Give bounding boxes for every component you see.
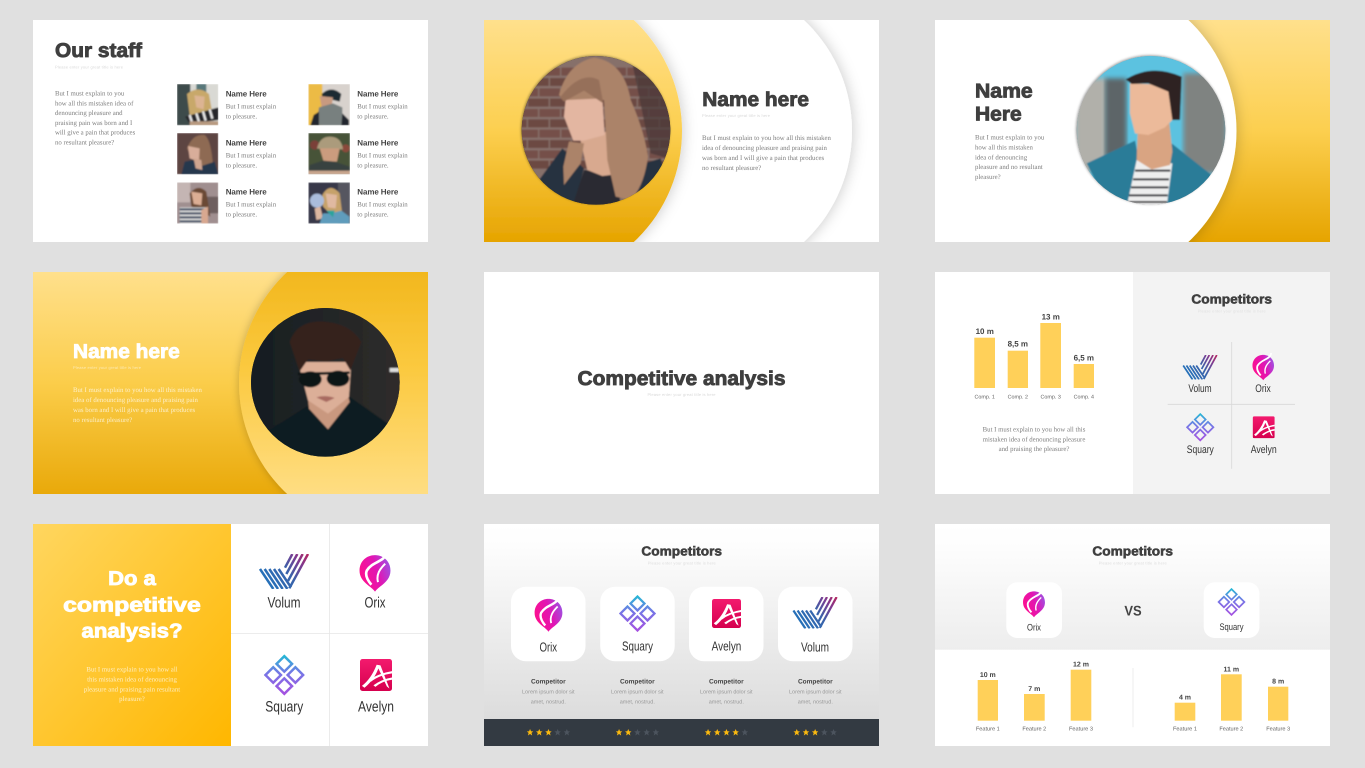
bar chart: comp 1 to 4: Comp. 1 [975, 395, 995, 401]
panel: competitors bar chart and logo grid [935, 272, 1330, 494]
text block: staff intro: how all this mistaken idea of [55, 100, 134, 107]
logo: Orix: Orix [1255, 383, 1271, 395]
logo: Orix [360, 552, 390, 611]
logo: Volum: Volum [1188, 383, 1212, 395]
logo: Avelyn [1251, 416, 1277, 456]
competitor descriptions: amet, nostrud. [798, 699, 833, 705]
text block: staff intro: no resultant pleasure? [55, 140, 114, 147]
staff names and roles: column 1: But I must explain [226, 153, 277, 160]
logo: Volum [260, 554, 308, 611]
bar chart: squary features: 11 m [1224, 666, 1239, 674]
staff photos [177, 84, 350, 224]
heading: competitors: Competitors [1191, 292, 1272, 306]
text block: mistaken idea of denouncing pleasure [983, 436, 1085, 443]
text block: was born and I will give a pain that produces [702, 155, 824, 162]
photo: man with sunglasses [250, 305, 401, 459]
heading: name here white: Name here [73, 341, 180, 363]
text block: But I must explain to you how all this mistaken [702, 135, 832, 142]
photo: woman with fringe [517, 53, 677, 210]
bar chart: comp 1 to 4: Comp. 2 [1008, 395, 1028, 401]
staff names and roles: column 1: Name Here [226, 90, 267, 99]
text block [702, 135, 832, 172]
bar chart: squary features [1173, 666, 1290, 732]
photo: man in denim shirt [1075, 53, 1228, 207]
text block: staff intro: But I must explain to you [55, 90, 125, 97]
card: Squary: Squary [622, 639, 653, 654]
subtitle: our staff: Please enter your great title is here [55, 65, 124, 70]
logo: Volum: Volum [268, 594, 300, 611]
card: Orix [511, 587, 586, 661]
text block: idea of denouncing pleasure and praising pain [73, 397, 199, 404]
staff names and roles: column 2: But I must explain [357, 153, 408, 160]
bar chart: squary features: Feature 2 [1219, 726, 1243, 732]
staff names and roles: column 1: But I must explain [226, 202, 277, 209]
panel: name here profile, yellow right [935, 20, 1330, 242]
logo: Orix [1252, 353, 1274, 395]
text block: idea of denouncing [975, 154, 1028, 161]
logo: Squary: Squary [265, 699, 304, 716]
text block: pleasure? [975, 174, 1001, 181]
text block: pleasure and praising pain resultant [84, 686, 180, 693]
card: Squary [1204, 582, 1259, 638]
text block: staff intro: denouncing pleasure and [55, 110, 123, 117]
heading: competitors: Competitors [641, 543, 722, 558]
bar chart: squary features: 8 m [1272, 678, 1284, 686]
bar chart: orix features: 10 m [980, 672, 996, 679]
text block [975, 134, 1045, 181]
card: Volum [778, 587, 852, 661]
subtitle: Please enter your great title is here [648, 392, 716, 397]
panel: name here profile, yellow inverted [33, 272, 428, 494]
staff names and roles: column 1: to pleasure. [226, 212, 257, 219]
subtitle: Please enter your great title is here [1099, 561, 1167, 566]
subtitle: Please enter your great title is here [1198, 309, 1266, 314]
bar chart: comp 1 to 4: 6,5 m [1074, 353, 1094, 362]
subtitle: Please enter your great title is here [73, 365, 142, 370]
text block: pleasure? [119, 696, 145, 703]
bar chart: squary features: Feature 3 [1266, 726, 1290, 732]
text block: But I must explain to you [975, 134, 1045, 141]
heading: name here two lines: Here [975, 104, 1022, 126]
staff names and roles: column 1: to pleasure. [226, 114, 257, 121]
competitor descriptions: Competitor [531, 678, 566, 685]
card: Volum: Volum [801, 640, 829, 655]
bar chart: orix features: Feature 3 [1069, 726, 1093, 732]
rating bar with stars [484, 719, 879, 746]
heading: do a competitive analysis: Do a [108, 568, 157, 590]
competitor descriptions: Competitor [798, 678, 833, 685]
staff names and roles: column 2: to pleasure. [357, 212, 389, 219]
heading: do a competitive analysis: competitive [63, 594, 201, 616]
card: Squary [600, 587, 675, 661]
bar chart: orix features [976, 662, 1093, 732]
competitor descriptions: Lorem ipsum dolor sit [522, 690, 575, 696]
competitor descriptions: amet, nostrud. [531, 699, 566, 705]
heading: our staff: Our staff [55, 40, 142, 62]
text block: no resultant pleasure? [73, 417, 132, 424]
text block: staff intro: will give a pain that produces [55, 130, 136, 137]
heading: competitors: Competitors [1092, 543, 1173, 558]
text block: this mistaken idea of denouncing [87, 676, 178, 684]
text block: staff intro [55, 90, 136, 147]
text block: and praising the pleasure? [999, 446, 1069, 453]
logo: Orix: Orix [364, 594, 386, 611]
bar chart: comp 1 to 4: Comp. 4 [1074, 395, 1094, 401]
text block: how all this mistaken [975, 144, 1034, 151]
text block: But I must explain to you how all this [983, 426, 1086, 433]
text block: But I must explain to you how all this mistaken [73, 387, 203, 394]
card: Orix [1006, 582, 1062, 638]
logo: Volum [1183, 355, 1217, 395]
panel: our staff slide [33, 20, 428, 242]
staff names and roles: column 2: But I must explain [357, 202, 408, 209]
logo: Avelyn [358, 659, 394, 716]
competitor descriptions: Competitor [709, 678, 744, 685]
bar chart: orix features: Feature 2 [1022, 726, 1046, 732]
bar chart: comp 1 to 4: 8,5 m [1008, 340, 1028, 349]
competitor descriptions [522, 678, 842, 705]
card: Squary: Squary [1220, 622, 1244, 633]
label: VS: VS [1124, 602, 1142, 618]
heading: competitive analysis: Competitive analysis [578, 368, 786, 390]
staff names and roles: column 1: Name Here [226, 188, 267, 197]
panel: competitors cards with ratings [484, 524, 879, 746]
competitor descriptions: Competitor [620, 678, 655, 685]
panel: orix vs squary [935, 524, 1330, 746]
card: Avelyn: Avelyn [712, 639, 741, 654]
staff names and roles: column 2: Name Here [357, 139, 399, 148]
text block [983, 426, 1086, 453]
text block [84, 667, 180, 703]
staff names and roles: column 2: Name Here [357, 90, 399, 99]
staff names and roles: column 2: Name Here [357, 188, 399, 197]
heading: name here: Name here [702, 89, 809, 111]
competitor descriptions: amet, nostrud. [620, 699, 655, 705]
competitor descriptions: amet, nostrud. [709, 699, 744, 705]
bar chart: comp 1 to 4: Comp. 3 [1041, 395, 1061, 401]
panel: competitive analysis title slide [484, 272, 879, 494]
bar chart: orix features: 7 m [1028, 686, 1040, 693]
bar chart: comp 1 to 4: 10 m [976, 327, 994, 336]
subtitle: Please enter your great title is here [648, 561, 716, 566]
bar chart: comp 1 to 4 [974, 312, 1094, 401]
bar chart: squary features: 4 m [1179, 695, 1191, 702]
text block: no resultant pleasure? [702, 165, 761, 172]
staff names and roles: column 1: to pleasure. [226, 163, 257, 170]
text block: staff intro: praising pain was born and I [55, 120, 133, 127]
card: Orix: Orix [539, 640, 558, 655]
heading: name here two lines: Name [975, 80, 1033, 102]
competitor descriptions: Lorem ipsum dolor sit [700, 690, 753, 696]
competitor descriptions: Lorem ipsum dolor sit [789, 690, 842, 696]
bar chart: squary features: Feature 1 [1173, 726, 1197, 732]
logo: Squary [265, 656, 304, 716]
panel: name here profile, yellow left [484, 20, 879, 242]
card: Avelyn [689, 587, 764, 661]
card: Orix: Orix [1027, 623, 1041, 634]
competitor descriptions: Lorem ipsum dolor sit [611, 690, 664, 696]
text block: was born and I will give a pain that produces [73, 407, 195, 414]
staff names and roles: column 2 [357, 90, 408, 219]
staff names and roles: column 2: to pleasure. [357, 163, 389, 170]
staff names and roles: column 2: to pleasure. [357, 114, 389, 121]
staff names and roles: column 1: But I must explain [226, 104, 277, 111]
bar chart: comp 1 to 4: 13 m [1042, 312, 1060, 321]
text block: But I must explain to you how all [86, 667, 178, 674]
subtitle: Please enter your great title is here [702, 113, 771, 118]
bar chart: orix features: Feature 1 [976, 726, 1000, 732]
text block: idea of denouncing pleasure and praising pain [702, 145, 828, 152]
staff names and roles: column 1: Name Here [226, 139, 267, 148]
logo: Avelyn: Avelyn [1251, 444, 1277, 456]
staff names and roles: column 2: But I must explain [357, 104, 408, 111]
text block: pleasure and no resultant [975, 164, 1043, 171]
staff names and roles: column 1 [226, 90, 277, 219]
heading: do a competitive analysis [63, 568, 201, 642]
logo: Avelyn: Avelyn [358, 699, 394, 716]
panel: do a competitive analysis [33, 524, 428, 746]
logo: Squary [1187, 414, 1214, 456]
bar chart: orix features: 12 m [1073, 662, 1089, 669]
text block [73, 387, 203, 424]
logo: Squary: Squary [1187, 444, 1214, 456]
heading: do a competitive analysis: analysis? [82, 620, 182, 642]
heading: name here two lines [976, 83, 1032, 122]
